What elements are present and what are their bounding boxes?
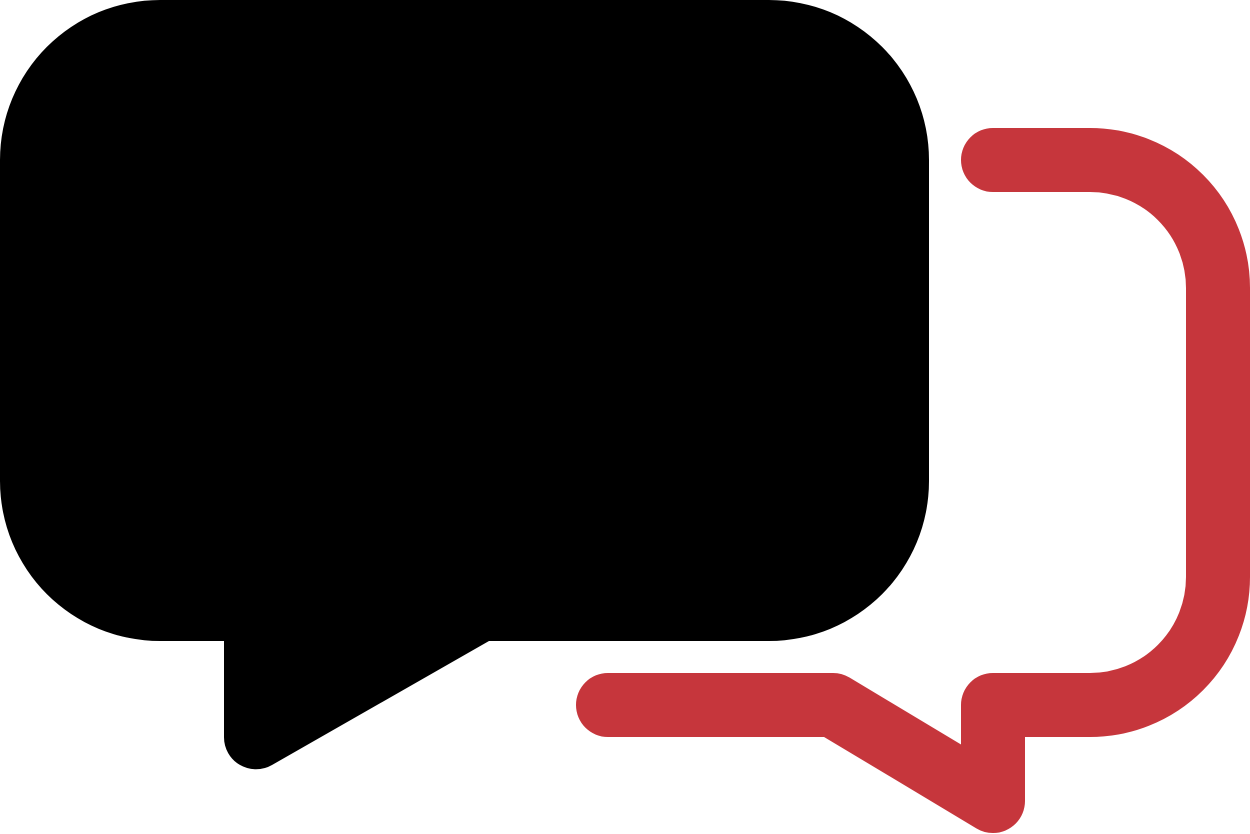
icon: black filled speech bubble bbox=[0, 0, 929, 769]
icon: red outlined speech bubble bbox=[608, 160, 1218, 801]
